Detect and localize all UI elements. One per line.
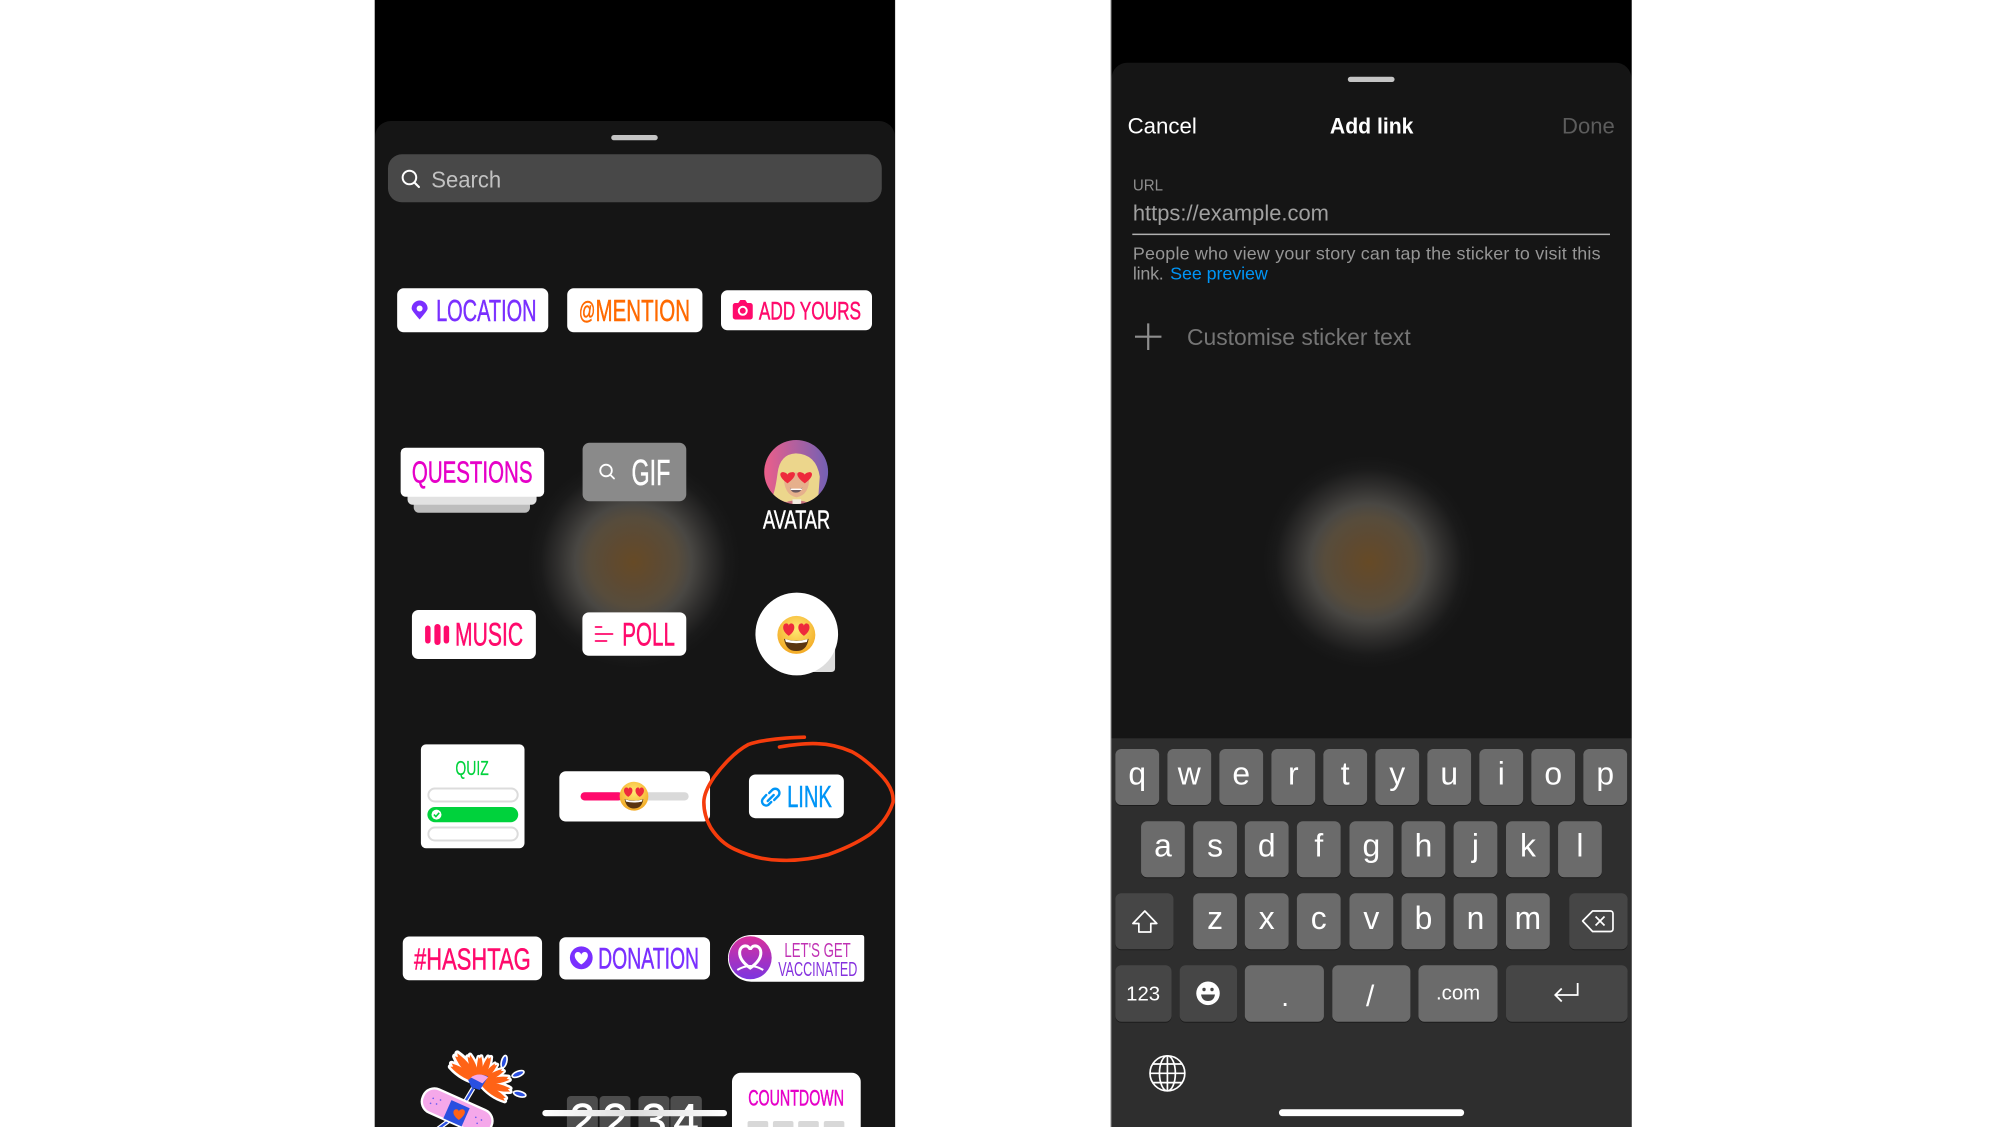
sticker: link: LINK xyxy=(787,780,832,814)
sticker: mention: @ xyxy=(579,297,595,325)
keyboard letters: x xyxy=(1259,900,1275,936)
sticker: donation: DONATION xyxy=(598,943,699,976)
sticker: gif xyxy=(583,443,686,501)
keyboard letters: . xyxy=(1281,981,1289,1012)
keyboard letters: a xyxy=(1154,828,1172,864)
search bar xyxy=(388,154,882,202)
sticker: quiz xyxy=(421,744,525,848)
sticker: music: MUSIC xyxy=(455,617,523,653)
sticker: questions: QUESTIONS xyxy=(412,456,532,490)
sticker: mention xyxy=(567,288,702,332)
keyboard letters: h xyxy=(1415,828,1432,864)
sticker: hashtag xyxy=(403,936,542,980)
search bar: Search xyxy=(431,166,501,192)
url field label: URL xyxy=(1133,177,1163,194)
keyboard letters: z xyxy=(1207,900,1223,936)
keyboard letters: y xyxy=(1389,755,1405,791)
helper text: People who view your story can tap the sticker to visit this xyxy=(1133,243,1601,263)
sticker: emoji slider xyxy=(559,771,710,822)
keyboard letters: s xyxy=(1207,828,1223,864)
sticker: link xyxy=(749,774,844,818)
keyboard letters: v xyxy=(1363,900,1379,936)
sticker: gif: GIF xyxy=(631,452,670,493)
keyboard letters: b xyxy=(1415,900,1432,936)
navigation: add link heading: Add link xyxy=(1330,113,1414,138)
sticker: donation xyxy=(559,937,710,980)
keyboard letters: p xyxy=(1596,755,1614,791)
keyboard letters: o xyxy=(1544,755,1562,791)
keyboard letters: l xyxy=(1576,828,1583,864)
sticker: hashtag: #HASHTAG xyxy=(414,941,531,976)
keyboard letters: d xyxy=(1258,828,1276,864)
keyboard letters: t xyxy=(1341,755,1350,791)
sticker: poll: POLL xyxy=(622,617,675,653)
navigation: cancel: Cancel xyxy=(1128,113,1197,138)
keyboard letters: r xyxy=(1288,755,1299,791)
sticker: location xyxy=(397,288,548,332)
icon: emoji key xyxy=(1196,982,1220,1005)
sticker: quiz: QUIZ xyxy=(455,757,489,780)
keyboard letters: f xyxy=(1314,828,1323,864)
sticker: emoji reaction bubble xyxy=(755,593,838,675)
keyboard letters: k xyxy=(1520,828,1536,864)
home indicator xyxy=(1279,1109,1464,1116)
keyboard letters: m xyxy=(1515,900,1541,936)
keyboard letters: e xyxy=(1232,755,1250,791)
keyboard letters xyxy=(1126,755,1614,1013)
keyboard xyxy=(1115,749,1628,1116)
keyboard letters: n xyxy=(1467,900,1484,936)
sticker: poll xyxy=(582,612,686,656)
keyboard letters: j xyxy=(1471,828,1479,864)
sticker: add yours: ADD YOURS xyxy=(759,297,861,325)
sheet handle xyxy=(611,135,658,140)
keyboard letters: i xyxy=(1498,755,1505,791)
sticker: countdown xyxy=(732,1073,861,1127)
sticker: let's get vaccinated: VACCINATED xyxy=(778,959,857,981)
sticker: flip timer xyxy=(542,1094,727,1127)
icon: return xyxy=(1555,983,1578,1002)
sticker: avatar: AVATAR xyxy=(763,506,830,534)
url field value: https://example.com xyxy=(1133,200,1329,225)
sticker: music xyxy=(412,610,536,659)
helper text: See preview xyxy=(1170,263,1268,283)
keyboard letters: g xyxy=(1363,828,1380,864)
sticker: bandage and flower xyxy=(418,1052,526,1127)
sticker: let's get vaccinated: LET'S GET xyxy=(784,939,851,962)
keyboard keys xyxy=(1115,749,1628,1022)
sticker: add yours xyxy=(721,290,872,330)
sticker: questions xyxy=(401,448,544,513)
right phone screen: add link xyxy=(1110,0,1632,1127)
red hand-drawn circle highlighting link sticker xyxy=(704,737,893,860)
keyboard letters: w xyxy=(1177,755,1202,791)
sticker: countdown: COUNTDOWN xyxy=(748,1086,844,1111)
keyboard letters: .com xyxy=(1436,981,1480,1004)
navigation: done: Done xyxy=(1562,113,1615,138)
helper text xyxy=(1133,243,1601,283)
keyboard letters: 123 xyxy=(1126,983,1160,1006)
keyboard letters: u xyxy=(1440,755,1458,791)
plus icon xyxy=(1135,323,1161,350)
customise sticker text: Customise sticker text xyxy=(1187,324,1411,350)
sticker: mention: MENTION xyxy=(596,294,690,328)
sticker: let's get vaccinated xyxy=(728,935,864,982)
icon: backspace xyxy=(1583,911,1613,932)
left phone screen: sticker tray xyxy=(374,0,895,1127)
sticker: avatar xyxy=(763,440,830,534)
sticker: location: LOCATION xyxy=(436,294,537,328)
keyboard letters: c xyxy=(1311,900,1327,936)
keyboard letters: q xyxy=(1128,755,1146,791)
icon: shift xyxy=(1133,911,1157,932)
helper text: link. xyxy=(1133,263,1164,283)
add link form and keyboard content xyxy=(1115,77,1628,1116)
sheet handle xyxy=(1348,77,1395,82)
keyboard letters: / xyxy=(1366,980,1375,1013)
icon: globe xyxy=(1150,1056,1185,1091)
